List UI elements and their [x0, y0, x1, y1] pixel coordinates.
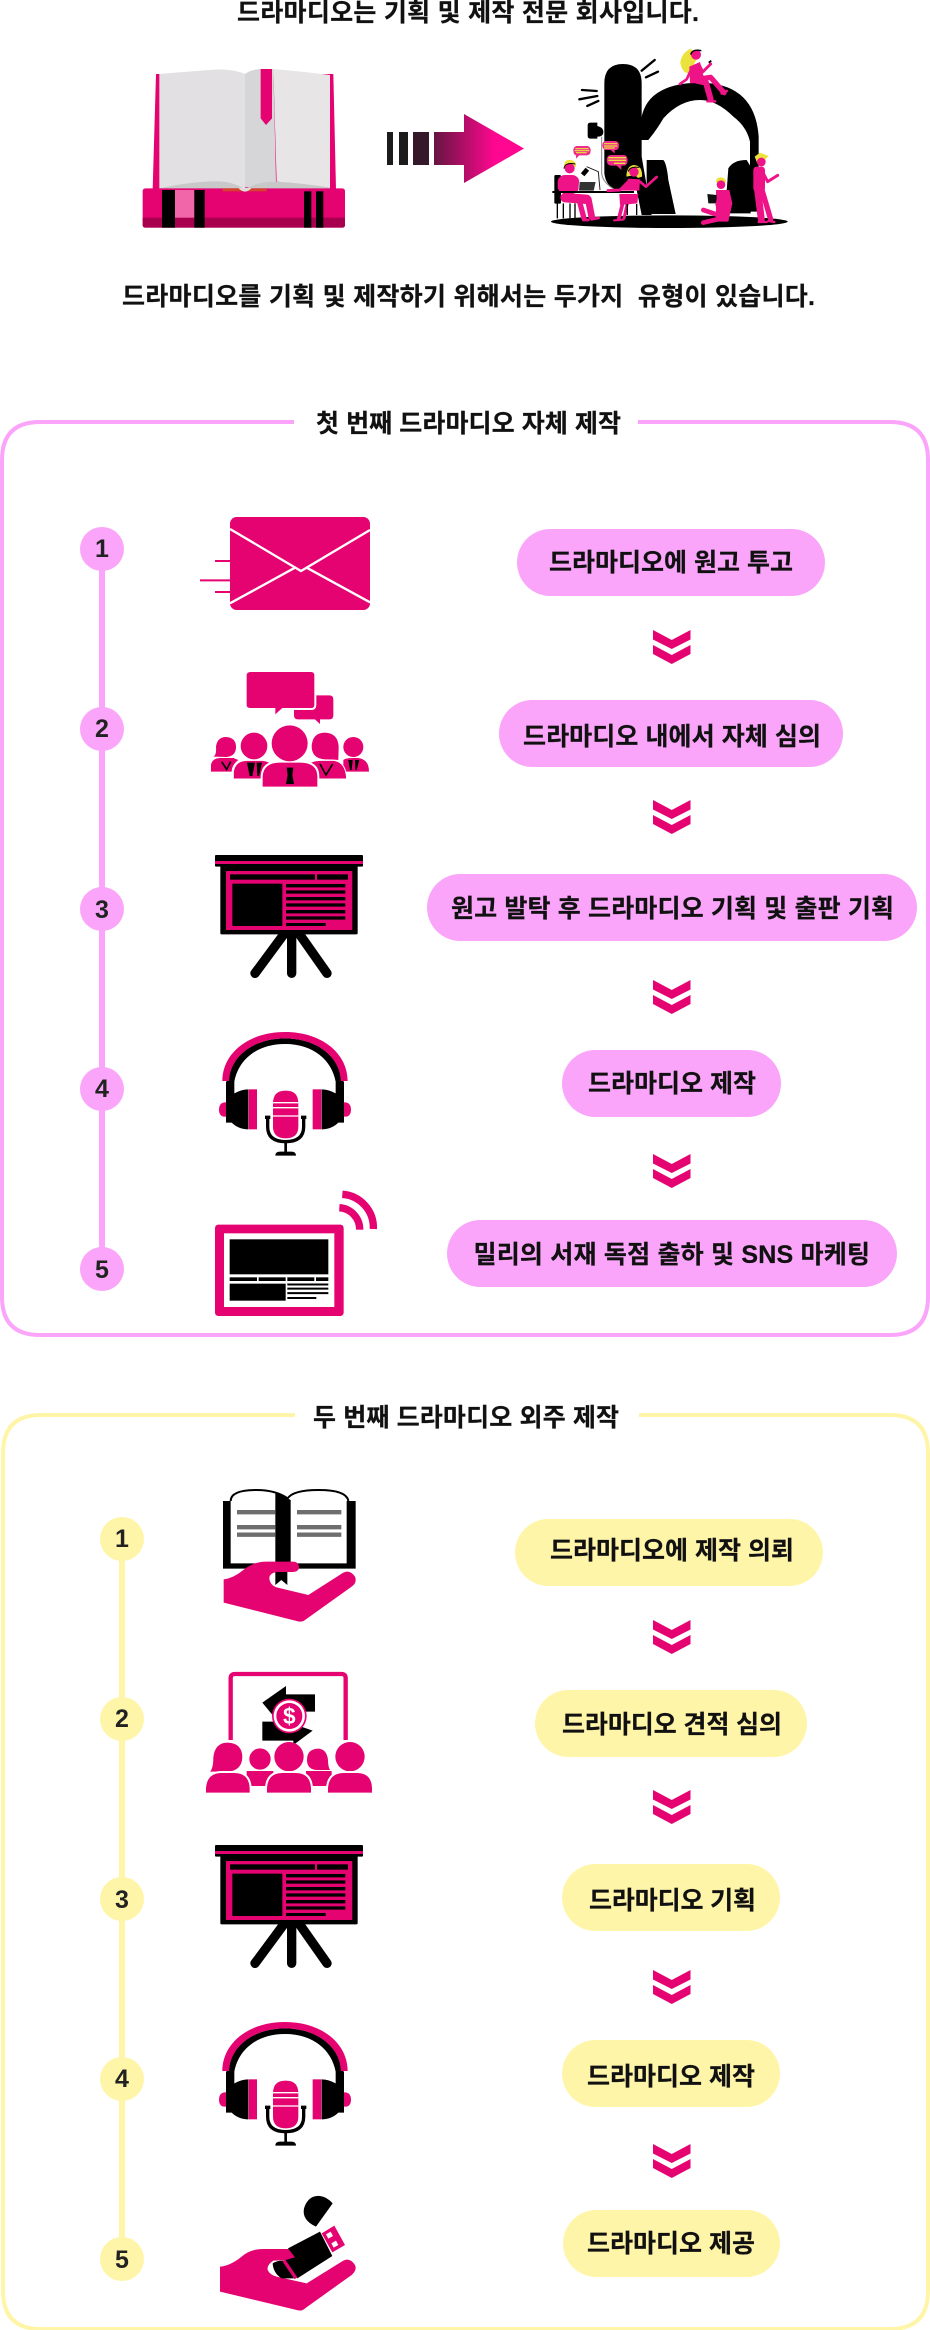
timeline: numbered steps: 2 — [115, 1705, 129, 1733]
intro text: two types: 드라마디오를 기획 및 제작하기 위해서는 두가지 유형이 있습니다. — [122, 283, 815, 311]
panel: outsourced production — [3, 1404, 928, 2329]
step labels: 드라마디오 제작 — [588, 1070, 756, 1098]
timeline: numbered steps — [80, 527, 124, 1291]
icon: cost estimate meeting — [205, 1674, 373, 1794]
person: standing right — [753, 153, 778, 222]
icon: USB drive on hand — [220, 2196, 356, 2311]
illustration: giant headphones with people — [551, 49, 788, 228]
panel heading: 두 번째 드라마디오 외주 제작 — [313, 1404, 619, 1432]
step labels: 드라마디오 제공 — [587, 2230, 755, 2258]
person: desk left — [552, 160, 634, 220]
step labels: 원고 발탁 후 드라마디오 기획 및 출판 기획 — [451, 895, 894, 923]
timeline: numbered steps: 1 — [95, 535, 109, 563]
panel: in-house production — [2, 410, 928, 1335]
icon: headphones and microphone — [219, 1032, 351, 1156]
arrow: book to audio — [387, 114, 524, 183]
step labels: 밀리의 서재 독점 출하 및 SNS 마케팅 — [474, 1241, 870, 1269]
arrows: double chevrons — [653, 630, 690, 1188]
icon: presentation board — [215, 1845, 363, 1963]
icon: tablet with wifi — [215, 1194, 373, 1316]
icon: book on hand — [223, 1490, 356, 1622]
timeline: numbered steps — [100, 1517, 144, 2281]
icon: headphones and microphone — [219, 2022, 351, 2146]
speech bubbles — [573, 141, 628, 170]
timeline: numbered steps: 4 — [115, 2065, 129, 2093]
step labels: 드라마디오 견적 심의 — [562, 1711, 782, 1739]
panel heading: 첫 번째 드라마디오 자체 제작 — [316, 410, 621, 438]
step labels — [427, 529, 917, 1287]
icon: envelope — [200, 517, 370, 610]
timeline: numbered steps: 3 — [115, 1886, 129, 1914]
step labels: 드라마디오 기획 — [589, 1887, 756, 1915]
person: seated on ground — [703, 177, 732, 223]
timeline: numbered steps: 3 — [95, 896, 109, 924]
icon: cost estimate meeting: $ — [283, 1703, 296, 1729]
step labels: 드라마디오 내에서 자체 심의 — [523, 723, 821, 751]
icon: presentation board — [215, 855, 363, 973]
icon: group discussion — [211, 671, 369, 788]
icon: open book — [143, 69, 345, 228]
panel border: yellow rounded frame — [3, 1415, 928, 2329]
timeline: numbered steps: 5 — [95, 1256, 109, 1284]
arrows: double chevrons — [653, 1620, 690, 2178]
person: top sitting — [680, 49, 727, 101]
step labels: 드라마디오 제작 — [587, 2063, 755, 2091]
timeline: numbered steps: 4 — [95, 1075, 109, 1103]
timeline: numbered steps: 5 — [115, 2246, 129, 2274]
step labels: 드라마디오에 제작 의뢰 — [550, 1537, 794, 1565]
person: desk right — [608, 165, 657, 220]
timeline: numbered steps: 1 — [115, 1525, 129, 1553]
timeline: numbered steps: 2 — [95, 715, 109, 743]
step labels — [515, 1519, 823, 2277]
step labels: 드라마디오에 원고 투고 — [549, 549, 793, 577]
panel border: pink rounded frame — [2, 422, 928, 1335]
